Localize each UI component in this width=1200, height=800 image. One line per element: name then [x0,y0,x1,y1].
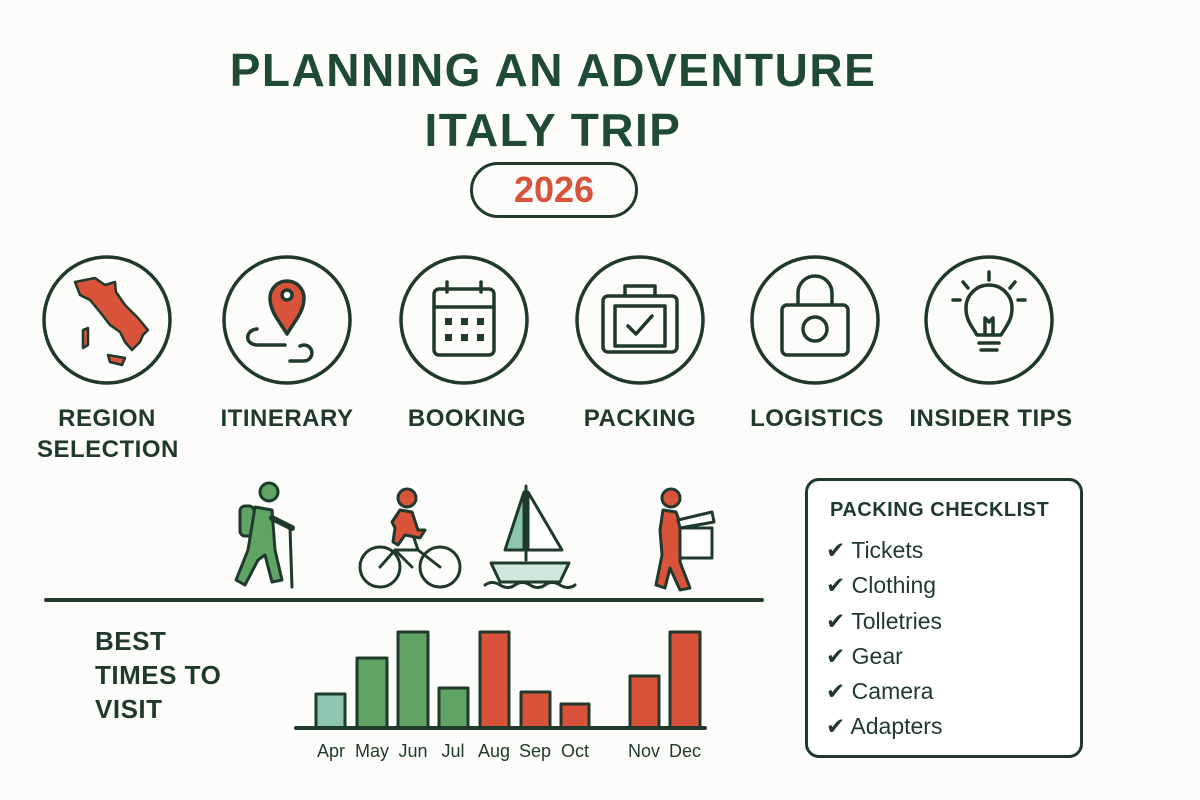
title: PLANNING AN ADVENTURE [230,44,876,96]
icon: calendar [401,257,527,383]
best times label: BEST [95,626,166,656]
icon: itinerary pin [224,257,350,383]
bar chart: Oct [561,741,589,761]
icons row [42,255,1054,385]
year badge [470,162,638,218]
label: region selection [37,405,179,463]
checklist items: ✔ Adapters [826,713,942,739]
label: region selection: REGION [58,405,156,432]
panel: packing checklist [805,478,1083,758]
bar chart: May [355,741,389,761]
label: itinerary: ITINERARY [221,405,353,432]
bar chart: Apr [317,741,345,761]
checklist items: ✔ Gear [826,643,903,669]
icon: suitcase [577,257,703,383]
best times label [95,626,221,724]
activities and chart [44,482,764,761]
label: region selection: SELECTION [37,436,179,463]
label: booking: BOOKING [408,405,526,432]
best times label: TIMES TO [95,660,221,690]
icon: filmmaker [656,489,714,590]
bar chart: Nov [628,741,660,761]
icon: cyclist [360,489,460,587]
checklist items: ✔ Clothing [826,572,936,598]
icon: sailboat [485,486,575,588]
icon: hiker [236,483,292,587]
best times label: VISIT [95,694,163,724]
checklist items: ✔ Tolletries [826,608,942,634]
label: insider tips: INSIDER TIPS [909,405,1073,432]
divider line [46,598,762,602]
checklist items [826,537,942,739]
icon: italy map [44,257,170,383]
checklist items: ✔ Tickets [826,537,923,563]
label: packing: PACKING [584,405,696,432]
checklist items: ✔ Camera [826,678,933,704]
label: logistics: LOGISTICS [750,405,884,432]
bar chart: Jul [441,741,465,761]
checklist heading: PACKING CHECKLIST [830,499,1049,521]
bar chart: Aug [478,741,510,761]
title [230,44,876,156]
bar chart [296,632,705,761]
bar chart: Dec [669,741,701,761]
year badge: 2026 [514,169,594,210]
bar chart: Sep [519,741,551,761]
icon: bulb [926,257,1052,383]
title: ITALY TRIP [424,104,681,156]
bar chart: Jun [398,741,428,761]
icon: lock [752,257,878,383]
